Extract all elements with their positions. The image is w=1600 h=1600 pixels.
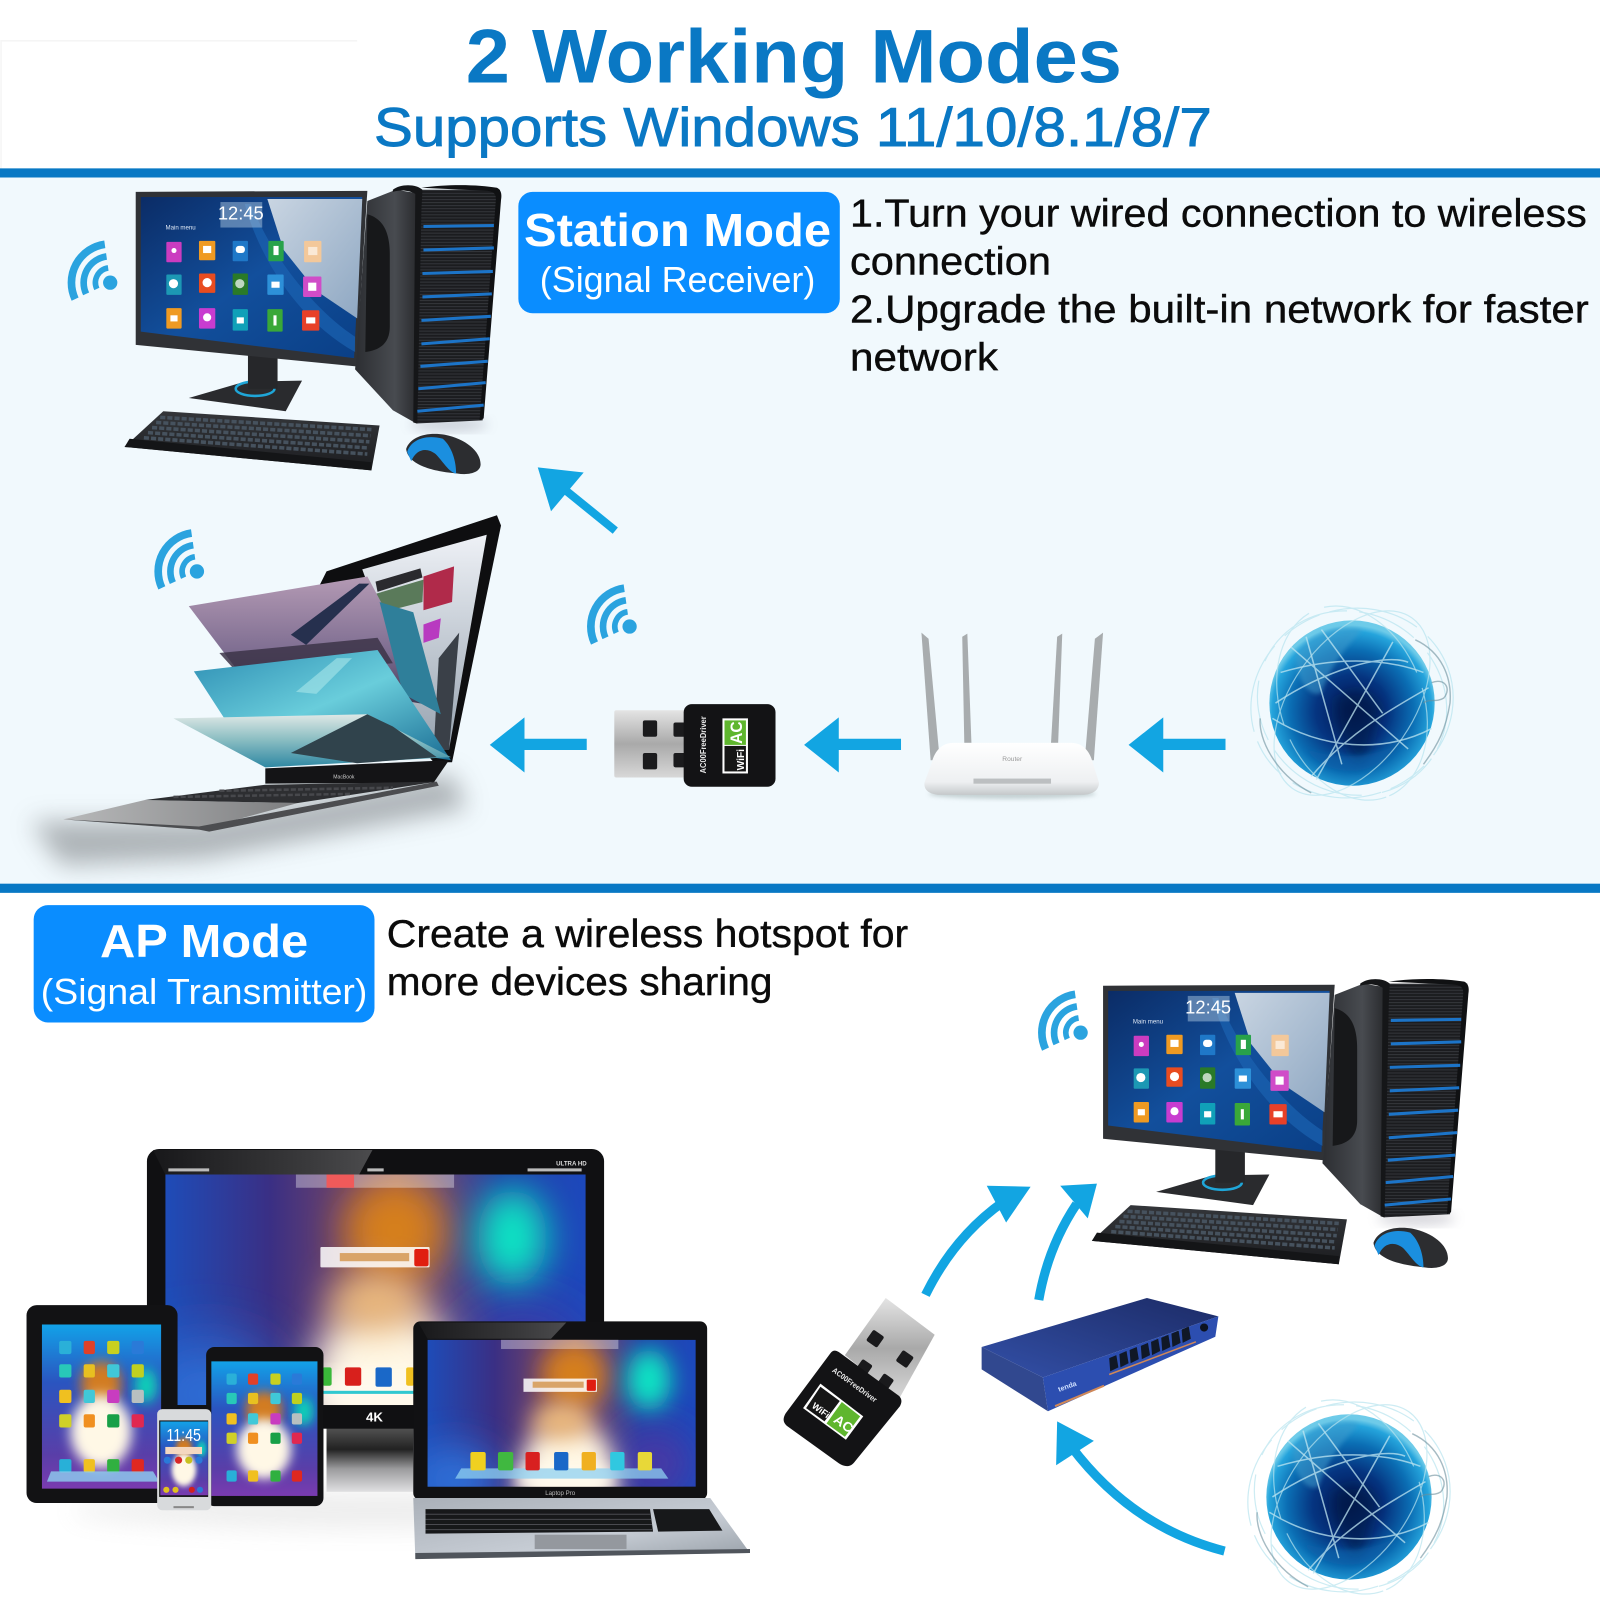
- station mode description: [850, 193, 1589, 379]
- laptop: MacBook: [333, 775, 355, 781]
- station mode description: network: [850, 336, 999, 379]
- phone: [157, 1409, 211, 1510]
- badge: station mode: (Signal Receiver): [540, 260, 815, 300]
- tablet large: [27, 1305, 178, 1503]
- big monitor: 4K: [366, 1409, 383, 1424]
- badge: ap mode: [34, 905, 374, 1022]
- usb wifi dongle: AC00FreeDriver: [698, 716, 708, 773]
- tablet small: [206, 1347, 323, 1506]
- icon: wifi middle: [591, 588, 637, 643]
- arrow: globe to switch: [1056, 1421, 1224, 1551]
- desktop computer: Main menu: [1133, 1018, 1163, 1025]
- station mode description: 2.Upgrade the built-in network for faster: [850, 288, 1589, 331]
- desktop computer: [1092, 979, 1469, 1268]
- usb wifi dongle: AC: [831, 1412, 857, 1436]
- usb wifi dongle: WiFi: [810, 1401, 832, 1420]
- badge: station mode: Station Mode: [524, 204, 831, 256]
- desktop computer: 12:45: [218, 202, 264, 223]
- big monitor: [71, 1149, 684, 1529]
- desktop computer: [124, 185, 501, 474]
- arrow: to desktop: [538, 467, 615, 531]
- ap mode description: Create a wireless hotspot for: [387, 913, 908, 956]
- router: [921, 633, 1103, 799]
- big monitor: ULTRA HD: [556, 1160, 587, 1167]
- subtitle: Supports Windows 11/10/8.1/8/7: [374, 96, 1212, 158]
- bottom divider: [0, 884, 1600, 893]
- icon: wifi laptop: [158, 533, 204, 588]
- ap mode description: [387, 913, 908, 1004]
- ap mode description: more devices sharing: [387, 961, 772, 1004]
- badge: ap mode: AP Mode: [100, 915, 308, 967]
- network switch: tenda: [1057, 1379, 1079, 1394]
- arrow: to router: [1129, 717, 1226, 772]
- faint scan box artifact: [1, 41, 357, 168]
- panel: ap mode: [27, 905, 1480, 1600]
- globe: [1221, 574, 1483, 832]
- desktop computer: Main menu: [165, 225, 196, 232]
- badge: station mode: [518, 192, 840, 313]
- laptop: [31, 515, 501, 865]
- network switch: [982, 1298, 1218, 1411]
- usb wifi dongle: AC00FreeDriver: [830, 1366, 879, 1404]
- icon: wifi desktop: [1042, 994, 1088, 1049]
- laptop open: Laptop Pro: [545, 1490, 576, 1497]
- usb wifi dongle: [784, 1298, 935, 1466]
- phone: 11:45: [166, 1425, 201, 1445]
- panel: station mode: [0, 178, 1600, 884]
- arrow: switch to desktop: [1039, 1184, 1097, 1300]
- arrow: dongle to desktop: [926, 1186, 1031, 1295]
- station mode description: connection: [850, 240, 1051, 283]
- usb wifi dongle: [614, 704, 776, 787]
- station mode description: 1.Turn your wired connection to wireless: [850, 193, 1587, 236]
- usb wifi dongle: AC: [728, 721, 746, 744]
- arrow: to laptop: [490, 717, 587, 772]
- top divider: [0, 168, 1600, 178]
- title: 2 Working Modes: [466, 15, 1122, 100]
- icon: wifi desktop: [71, 244, 117, 299]
- globe: [1218, 1368, 1480, 1600]
- arrow: to dongle: [804, 717, 901, 772]
- laptop open: [408, 1321, 750, 1559]
- router: Router: [1002, 756, 1023, 763]
- usb wifi dongle: WiFi: [736, 749, 747, 770]
- desktop computer: 12:45: [1185, 996, 1231, 1017]
- badge: ap mode: (Signal Transmitter): [41, 972, 367, 1012]
